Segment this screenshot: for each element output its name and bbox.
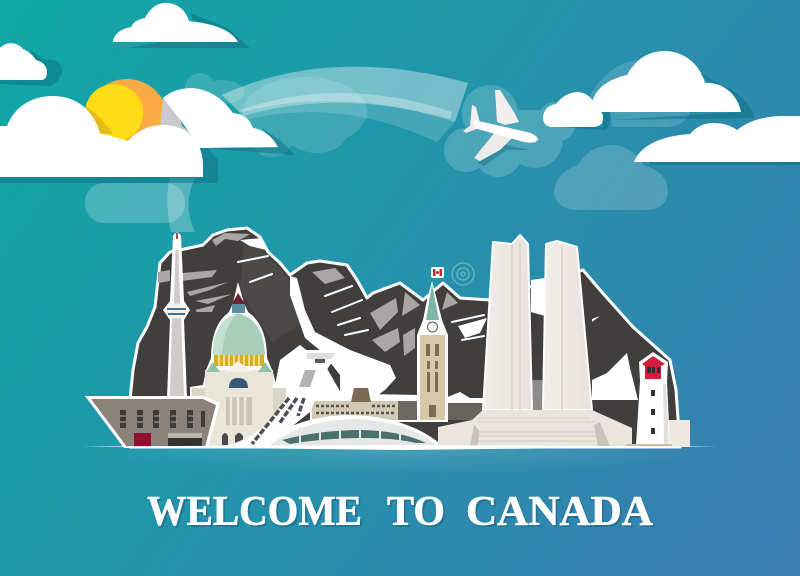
shadow: top cloud [127, 13, 250, 48]
trail band: lower arc [238, 101, 455, 142]
basilica arched window [229, 378, 248, 388]
plane tailplane [463, 123, 482, 133]
title shadow: TO [389, 490, 447, 537]
lighthouse [626, 352, 690, 447]
cloud shadows [0, 13, 800, 183]
memorial pylon facets [512, 244, 562, 410]
flag red bars [433, 269, 442, 276]
Canadian flag [431, 267, 444, 278]
lighthouse shaded side [663, 384, 669, 445]
shadow: mid cloud [200, 128, 295, 155]
title shadow: WELCOME [149, 490, 364, 537]
cloud: small right [543, 92, 603, 127]
plane fuselage [474, 120, 538, 143]
peace tower outline [417, 281, 448, 422]
Peace Tower [417, 267, 448, 422]
building outline [85, 396, 220, 448]
dome shading [268, 419, 438, 447]
mid cloud body [163, 88, 278, 148]
stadium dome [258, 415, 444, 447]
grey rock strata [158, 233, 458, 356]
lighthouse outline [636, 352, 670, 445]
plane shadow [470, 137, 530, 166]
dome outline [258, 415, 444, 447]
basilica side turrets [206, 362, 272, 372]
west block outline [310, 381, 420, 422]
basilica wings [192, 388, 286, 447]
trail band: descending stem [167, 178, 195, 232]
lighthouse windows [651, 390, 655, 434]
shadow: big left cloud [0, 140, 218, 183]
title text: TO [387, 487, 445, 534]
building window panes [120, 416, 193, 422]
landmarks [80, 228, 720, 450]
tower pod [166, 304, 188, 318]
shadow: small right cloud [560, 108, 610, 130]
pale background clouds [85, 60, 700, 223]
building windows [120, 410, 205, 428]
tower shaft [170, 250, 184, 396]
stadium cable ribs [252, 398, 304, 444]
plane upper wing [495, 90, 519, 125]
cloud: big left [0, 96, 203, 177]
pale cloud: behind right cloud [590, 60, 700, 127]
trail band: upper arc [222, 67, 468, 122]
title shadow: CANADA [468, 490, 656, 537]
peace tower body [420, 335, 445, 420]
memorial right pylon [543, 241, 592, 410]
tower halo [163, 232, 190, 398]
basilica dome light facet [213, 313, 238, 355]
basilica pediment [225, 361, 252, 372]
cloud: left small [0, 43, 47, 80]
tower pod windows [167, 308, 186, 315]
west block wall [312, 401, 420, 420]
sun [85, 79, 168, 161]
parliament east block [445, 392, 486, 420]
sun outer disc [86, 79, 168, 161]
stadium outline [222, 350, 340, 447]
building red door [134, 433, 151, 447]
Olympic stadium tower [222, 350, 340, 447]
mountain silhouette [130, 228, 680, 447]
peace tower spire [426, 284, 439, 320]
shadow: far right cloud [650, 162, 800, 165]
stadium tower panel [299, 370, 316, 387]
CN tower [163, 232, 190, 398]
west block roof [351, 388, 371, 402]
pale cloud: behind arc [185, 73, 367, 157]
title [147, 487, 656, 537]
shadow: left small cloud [0, 50, 62, 86]
mountain lighter facet [240, 232, 300, 342]
east block wall [445, 403, 485, 420]
basilica lantern cone [232, 293, 245, 304]
pale cloud: lower left [85, 183, 185, 223]
title text: WELCOME [147, 487, 362, 534]
plane lower wing [474, 132, 513, 161]
ground glow [80, 426, 720, 474]
sun inner disc [85, 84, 143, 142]
west block dark wing [398, 401, 420, 420]
east block roof [445, 392, 486, 407]
title text: CANADA [466, 487, 654, 534]
west block windows [316, 406, 396, 413]
peace tower clock [428, 322, 438, 332]
shadow: upper right cloud [610, 66, 755, 120]
memorial left pylon [483, 235, 532, 410]
flight trail [167, 67, 468, 232]
basilica [190, 282, 288, 447]
airplane [463, 90, 538, 166]
watermark spiral [452, 263, 474, 285]
title shadow [149, 490, 656, 537]
mountain range [130, 228, 680, 447]
cloud shading on mid cloud [160, 98, 212, 148]
lighthouse red lantern [642, 356, 665, 379]
stadium tower head [307, 353, 335, 359]
antenna tip [176, 233, 178, 239]
basilica body [205, 370, 273, 447]
cloud: top [113, 3, 238, 42]
basilica lantern [232, 304, 245, 313]
flag leaf [436, 271, 439, 274]
basilica outline [190, 282, 288, 447]
pale cloud: around plane [444, 85, 576, 177]
Vimy memorial [438, 235, 632, 447]
title text [147, 487, 654, 534]
basilica columns [226, 397, 252, 425]
cloud: far right [634, 116, 800, 162]
keeper building [666, 420, 690, 447]
dome glass ribs [282, 430, 426, 444]
low modern building [85, 396, 220, 448]
building dark entrance [168, 434, 202, 447]
cloud: mid, behind sun [160, 88, 278, 148]
grey gap between pylons [531, 380, 545, 410]
plane tail fin [470, 105, 480, 126]
flag backing [431, 267, 444, 278]
basilica doors [222, 433, 243, 445]
pale cloud: lower right [554, 145, 668, 210]
cloud: upper right [590, 51, 741, 112]
snow streaks [238, 256, 484, 340]
memorial step lines [476, 418, 596, 441]
memorial statues [470, 422, 610, 447]
white snow patches [240, 238, 638, 400]
memorial steps base [438, 410, 632, 447]
stadium tower windows [315, 359, 325, 363]
peace tower windows [426, 344, 439, 417]
basilica drum columns [219, 355, 259, 366]
building wall [91, 399, 216, 447]
lighthouse glass [647, 367, 660, 373]
building entrance canopy [168, 433, 202, 438]
basilica dome [213, 313, 265, 355]
trail band: inner stripe [240, 93, 452, 119]
ground line [80, 445, 720, 450]
basilica gold drum [214, 355, 264, 366]
sun shaded edge [86, 107, 113, 134]
lighthouse base [626, 444, 672, 447]
parliament west block [310, 381, 420, 422]
